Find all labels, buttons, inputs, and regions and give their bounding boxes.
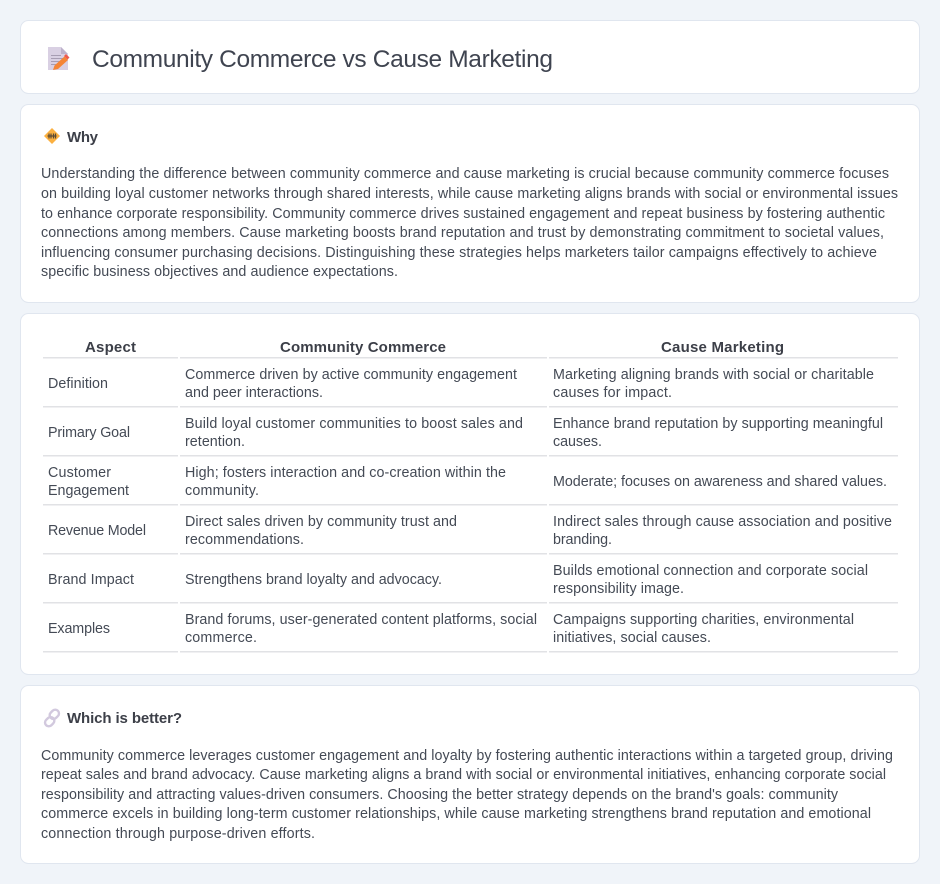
table header: Community Commerce — [280, 339, 446, 356]
table row: examples: Brand forums, user-generated content platforms, social — [185, 612, 537, 628]
table row: brand impact: responsibility image. — [553, 581, 684, 597]
text block: why paragraph: connections among members. Cause marketing boosts brand reputation and trust by demonstrating commitment to societal values, — [41, 225, 884, 241]
table row: primary goal: causes. — [553, 434, 602, 450]
icon: chain link — [43, 708, 61, 728]
table row: customer engagement: High; fosters interaction and co-creation within the — [185, 465, 506, 481]
table row: definition: Commerce driven by active community engagement — [185, 367, 517, 383]
text block: why paragraph: on building loyal customer networks through shared interests, while cause marketing aligns brands with social or environmental issues — [41, 186, 898, 202]
table row: primary goal: retention. — [185, 434, 245, 450]
text block: why paragraph: to enhance corporate responsibility. Community commerce drives sustained engagement and repeat business by fostering authentic — [41, 206, 885, 222]
table row: revenue model: Revenue Model — [48, 523, 146, 539]
table header — [43, 339, 898, 358]
table row: examples — [43, 612, 898, 652]
text block: why paragraph — [41, 166, 898, 280]
table row: primary goal: Build loyal customer communities to boost sales and — [185, 416, 523, 432]
table row: definition: Definition — [48, 376, 108, 392]
table row: primary goal — [43, 416, 898, 456]
text block: why paragraph: Understanding the difference between community commerce and cause marketing is crucial because community commerce focuses — [41, 166, 889, 182]
table row: revenue model — [43, 514, 898, 554]
text block: which is better paragraph: Community commerce leverages customer engagement and loyalty by fostering authentic interactions within a targeted group, driving — [41, 748, 893, 764]
table row: brand impact: Builds emotional connection and corporate social — [553, 563, 868, 579]
text block: which is better paragraph — [41, 748, 893, 842]
table row: customer engagement: community. — [185, 483, 259, 499]
table row: revenue model: Indirect sales through cause association and positive — [553, 514, 892, 530]
table row: brand impact — [43, 563, 898, 604]
table row: primary goal: Enhance brand reputation by supporting meaningful — [553, 416, 883, 432]
table row: revenue model: branding. — [553, 532, 612, 548]
table header: Cause Marketing — [661, 339, 784, 356]
table row: brand impact: Strengthens brand loyalty and advocacy. — [185, 572, 442, 588]
table row: examples: initiatives, social causes. — [553, 630, 711, 646]
table row: revenue model: recommendations. — [185, 532, 304, 548]
table row: definition: causes for impact. — [553, 385, 672, 401]
panel: why — [20, 104, 920, 302]
table row: definition: and peer interactions. — [185, 385, 323, 401]
text block: which is better paragraph: connection through purpose-driven efforts. — [41, 826, 315, 842]
table row: examples: Campaigns supporting charities, environmental — [553, 612, 854, 628]
icon: warning diamond — [44, 128, 60, 144]
table row: definition — [43, 367, 898, 408]
panel: title header — [20, 20, 920, 94]
table row: customer engagement: Engagement — [48, 483, 129, 499]
text block: which is better paragraph: responsibility and attracting values-driven consumers. Choosing the better strategy depends on the brand's goals: community — [41, 787, 839, 803]
heading: why: Why — [67, 129, 99, 146]
text block: why paragraph: influencing consumer purchasing decisions. Distinguishing these strategies helps marketers tailor campaigns effectively to achieve — [41, 245, 877, 261]
table row: revenue model: Direct sales driven by community trust and — [185, 514, 457, 530]
table row: primary goal: Primary Goal — [48, 425, 130, 441]
title: Community Commerce vs Cause Marketing — [92, 46, 553, 73]
table row: customer engagement: Customer — [48, 465, 111, 481]
table row: brand impact: Brand Impact — [48, 572, 134, 588]
text block: why paragraph: specific business objectives and audience expectations. — [41, 264, 398, 280]
heading: which is better: Which is better? — [67, 710, 182, 727]
table row: customer engagement: Moderate; focuses on awareness and shared values. — [553, 474, 887, 490]
table row: examples: commerce. — [185, 630, 257, 646]
text block: which is better paragraph: commerce excels in building long-term customer relationships, while cause marketing strengthens brand reputation and emotional — [41, 806, 871, 822]
table row: definition: Marketing aligning brands with social or charitable — [553, 367, 874, 383]
panel: which is better — [20, 686, 920, 864]
table row: examples: Examples — [48, 621, 110, 637]
table header: Aspect — [85, 339, 136, 356]
icon: document with pencil — [48, 47, 70, 70]
text block: which is better paragraph: repeat sales and brand advocacy. Cause marketing aligns a brand with social or environmental initiatives, enhancing corporate social — [41, 767, 886, 783]
panel: comparison table — [20, 314, 920, 674]
table row: customer engagement — [43, 465, 898, 506]
